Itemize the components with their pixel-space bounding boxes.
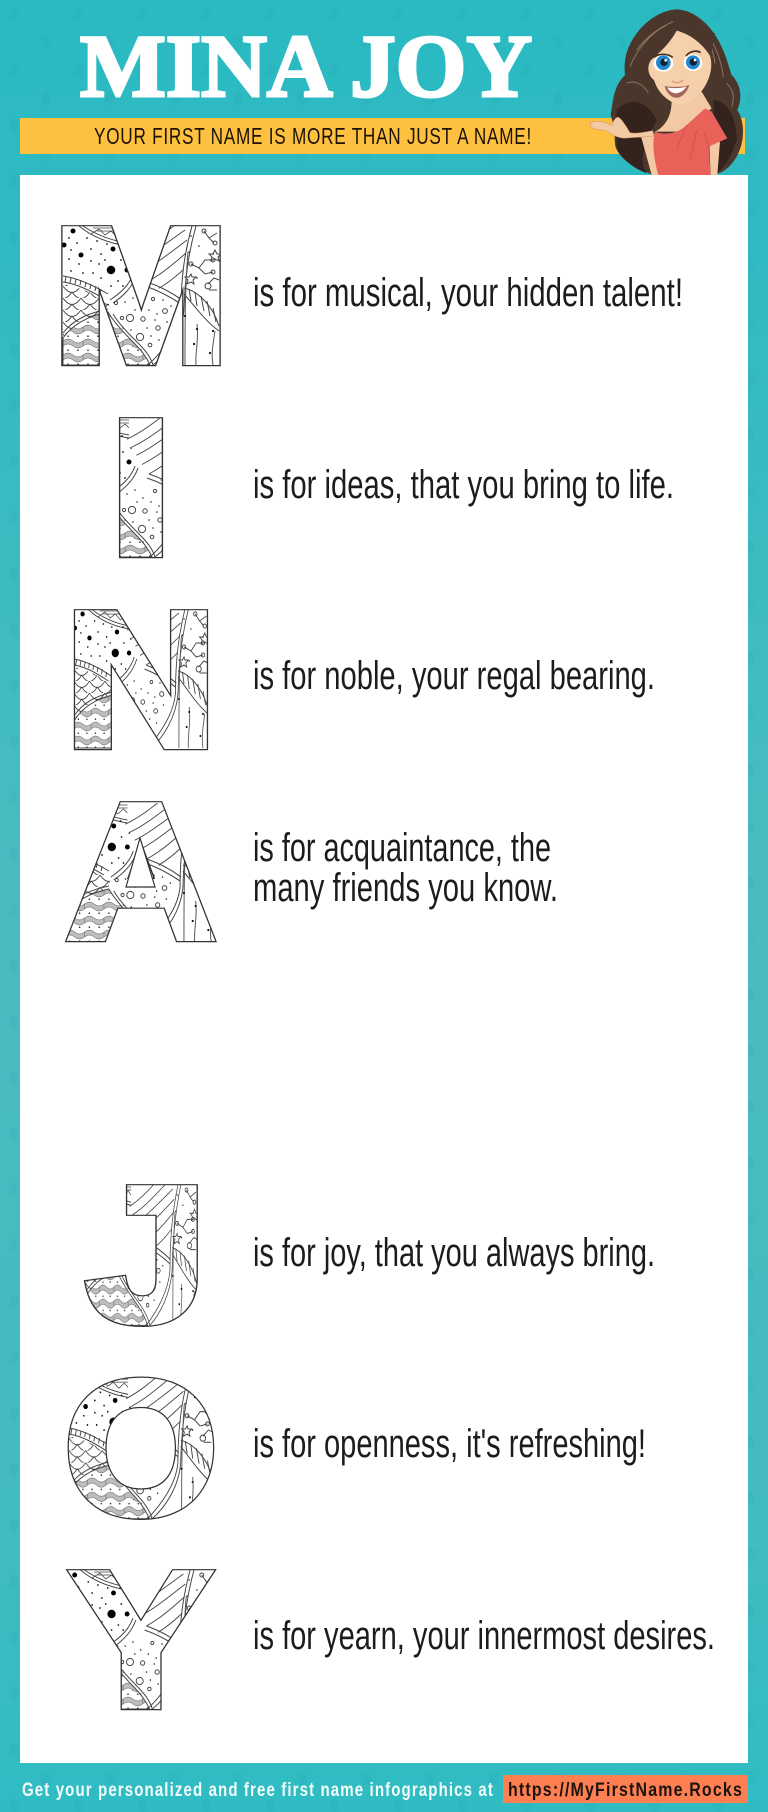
- footer url badge: [503, 1775, 748, 1803]
- letter Y: [66, 1569, 217, 1710]
- footer call to action: Get your personalized and free first name infographics at: [22, 1780, 494, 1801]
- letter M: [61, 225, 221, 366]
- letter N: N: [66, 574, 216, 786]
- letter A: A: [68, 765, 214, 978]
- letter M: M: [53, 189, 229, 402]
- letter O: O: [65, 1342, 217, 1553]
- text: A lines: is for acquaintance, the: [253, 826, 551, 870]
- yellow subtitle banner: YOUR FIRST NAME IS MORE THAN JUST A NAME!: [94, 123, 532, 149]
- yellow subtitle banner: [20, 118, 745, 154]
- letter A: [64, 801, 217, 942]
- title: MINA JOY: [80, 18, 532, 116]
- letter Y: Y: [72, 1534, 210, 1746]
- letter N: [74, 609, 208, 750]
- letter I: [118, 417, 164, 558]
- illustration: cartoon woman presenting: [590, 9, 743, 175]
- letter J: [84, 1184, 198, 1327]
- letter J: J: [87, 1148, 207, 1360]
- text: A lines: [253, 826, 558, 910]
- text: A lines: many friends you know.: [253, 866, 558, 910]
- letter I: I: [110, 381, 172, 593]
- letter O: [68, 1376, 214, 1520]
